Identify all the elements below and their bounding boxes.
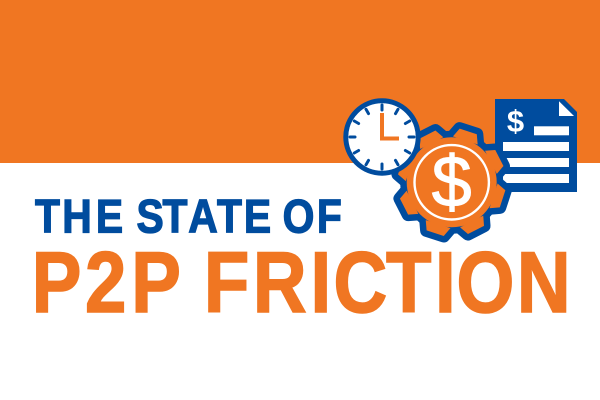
title line: P2P Friction: P2P FRICTION: [32, 235, 571, 332]
icon: clock: [346, 101, 418, 173]
icon: invoice document: [495, 99, 577, 192]
orange header band: [0, 0, 600, 163]
title line: The State Of: THE STATE OF: [35, 191, 342, 243]
icon: invoice document: $: [507, 104, 524, 138]
icon: gear with dollar sign: [397, 127, 507, 237]
icon: gear with dollar sign: $: [432, 142, 472, 222]
